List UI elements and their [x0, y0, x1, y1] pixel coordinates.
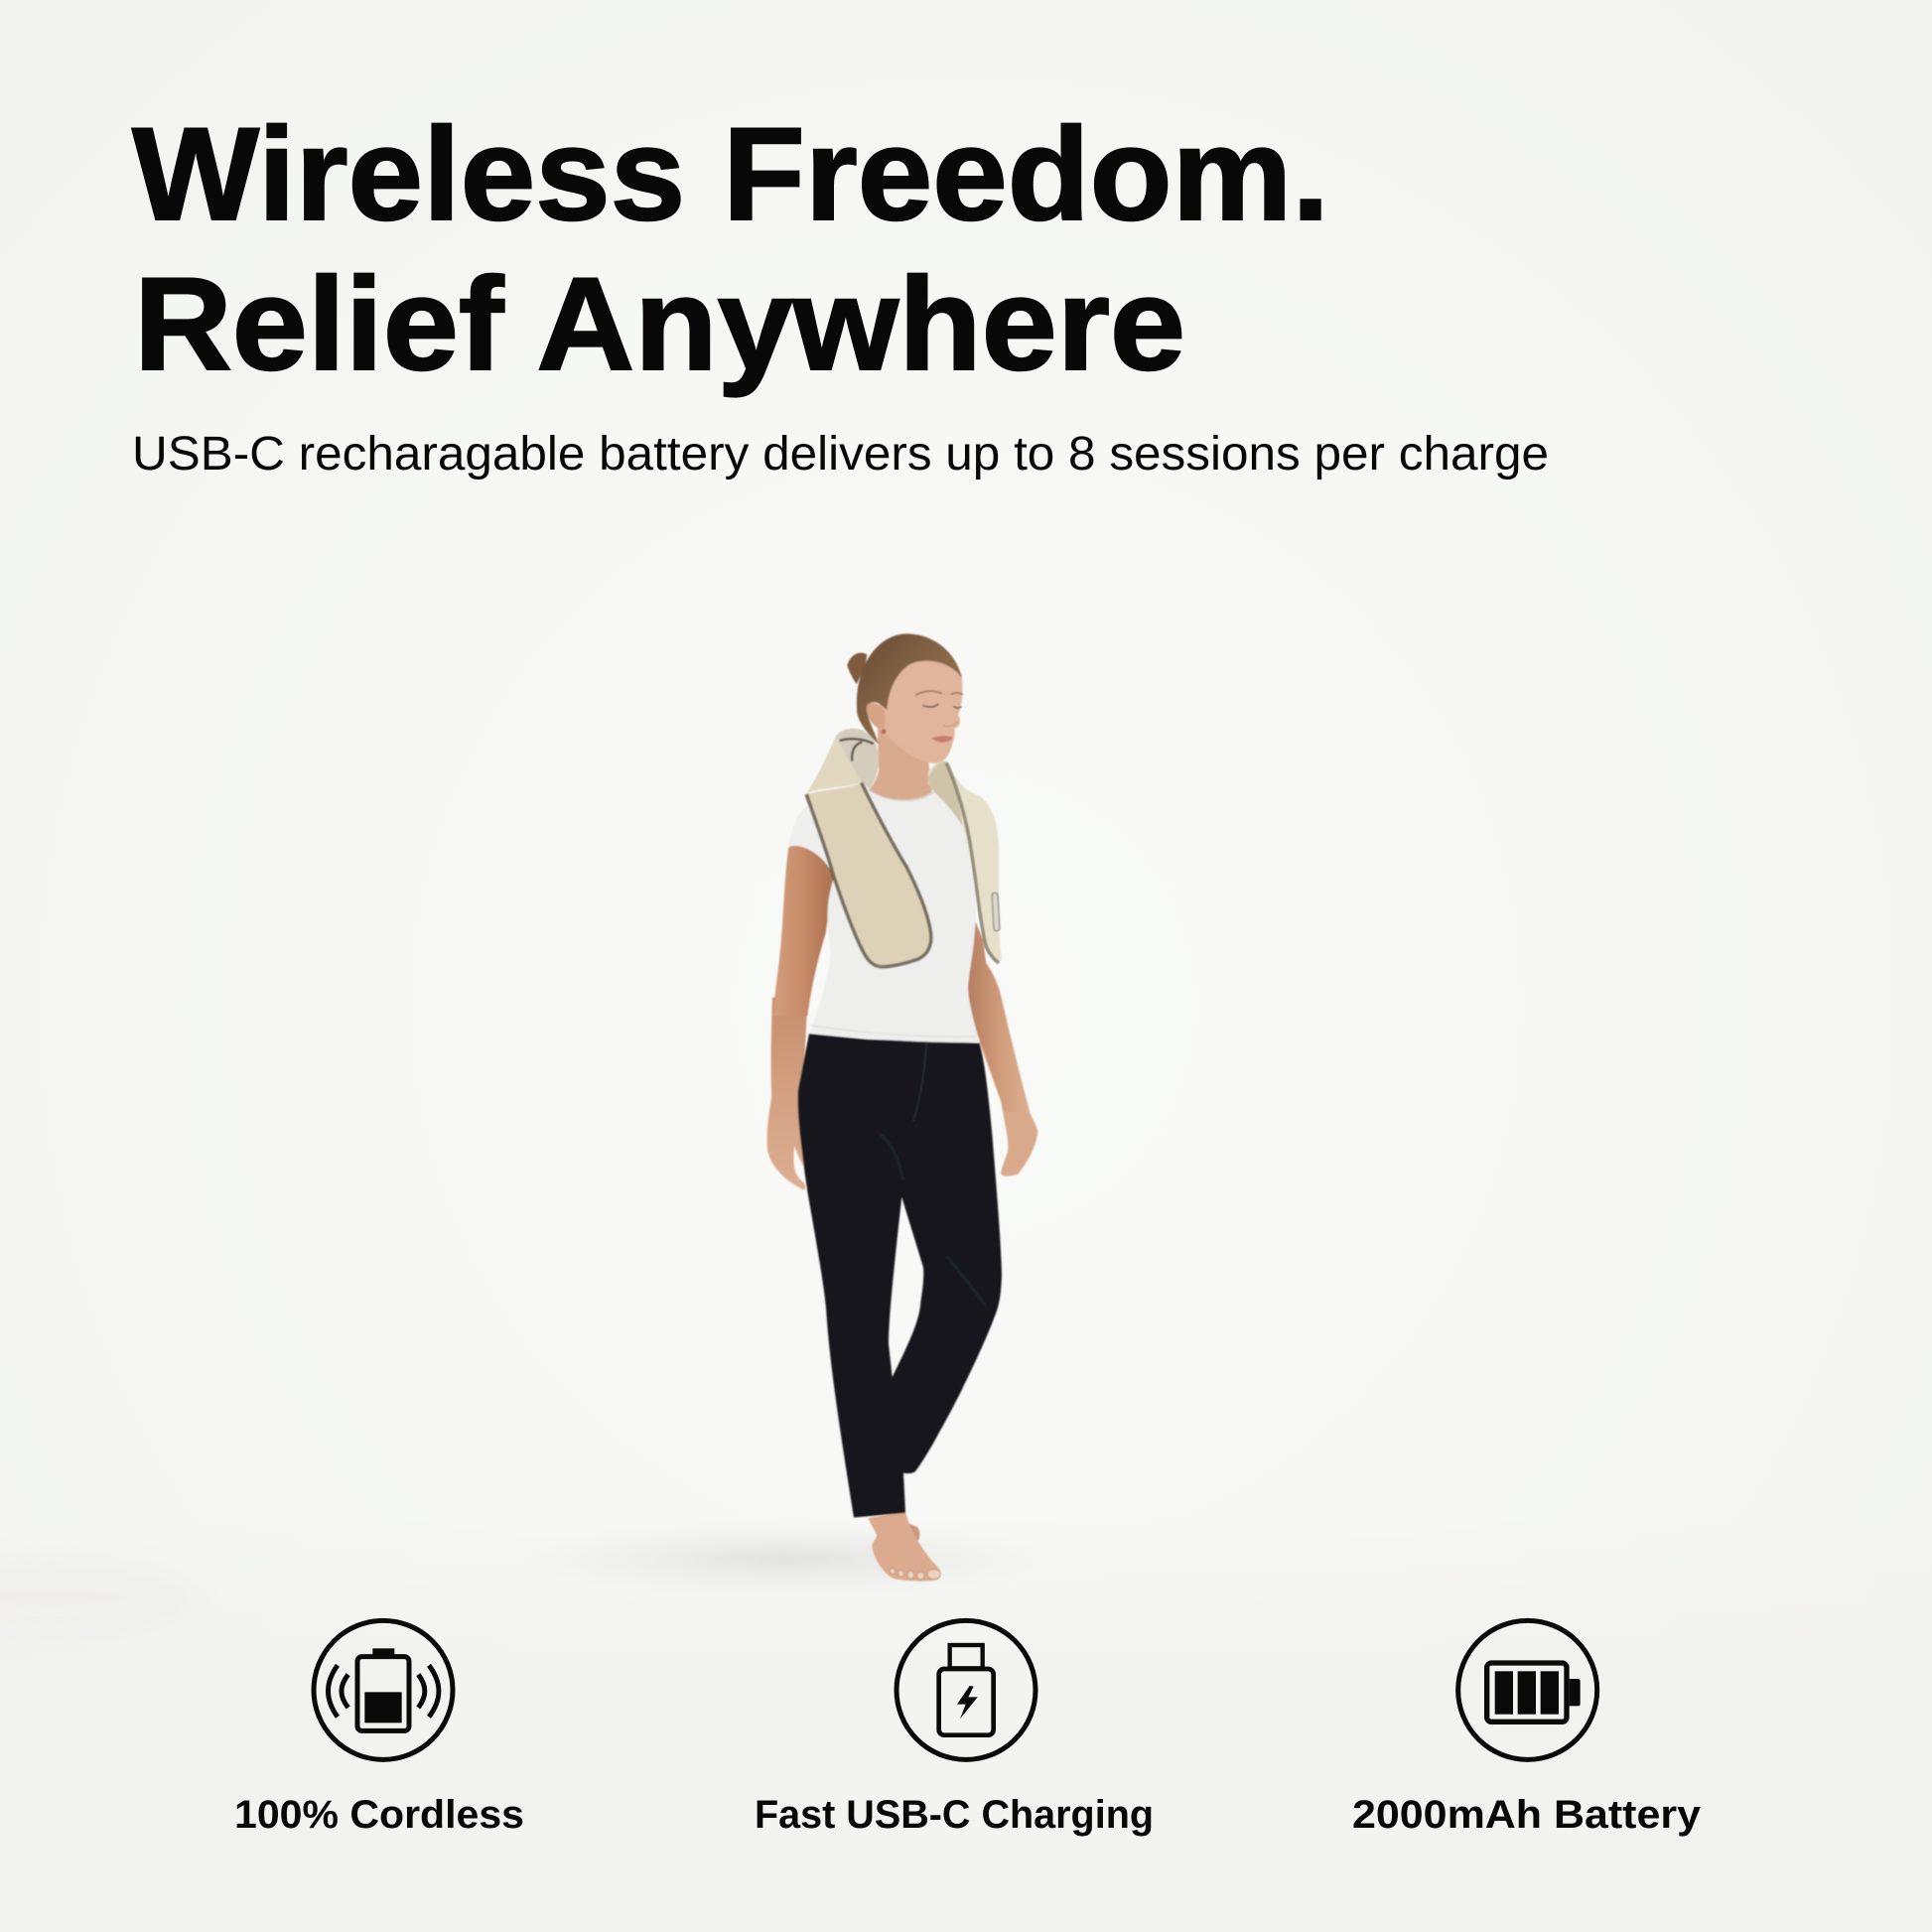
hair bun: [847, 653, 867, 684]
back foot: [906, 1522, 919, 1544]
floor shadow: [516, 1521, 1052, 1596]
label: Fast USB-C Charging: [755, 1793, 1154, 1837]
title: [132, 101, 1329, 398]
front foot: [869, 1512, 941, 1582]
face features: [916, 691, 962, 708]
title: Wireless Freedom.: [132, 101, 1329, 248]
lower body: trousers, hands and feet: [767, 998, 1037, 1582]
right upper arm: [968, 915, 1030, 1112]
label: 2000mAh Battery: [1352, 1793, 1702, 1837]
icon: battery with wireless waves: [314, 1620, 453, 1759]
left forearm and hand: [767, 998, 807, 1190]
upper body: [773, 633, 1030, 1112]
head: [882, 660, 962, 763]
massager: near strap: [806, 729, 931, 967]
feature: 100% Cordless: [234, 1620, 524, 1837]
neck: [870, 728, 932, 800]
massager: far strap: [928, 761, 1002, 964]
feature: Fast USB-C Charging: [755, 1620, 1154, 1837]
title: Relief Anywhere: [134, 251, 1185, 398]
icon: full battery: [1458, 1620, 1597, 1759]
white t-shirt: [788, 782, 980, 1042]
icon: USB-C charger with bolt: [897, 1620, 1035, 1759]
right forearm and hand: [976, 1013, 1037, 1176]
trousers: [798, 1034, 1002, 1518]
ear: [867, 703, 886, 730]
label: 100% Cordless: [234, 1793, 524, 1837]
feature: 2000mAh Battery: [1352, 1620, 1702, 1837]
left upper arm: [773, 846, 834, 1016]
woman wearing neck massager: [767, 633, 1037, 1582]
subtitle: USB-C recharagable battery delivers up to 8 sessions per charge: [132, 428, 1549, 481]
hair: [857, 633, 962, 745]
